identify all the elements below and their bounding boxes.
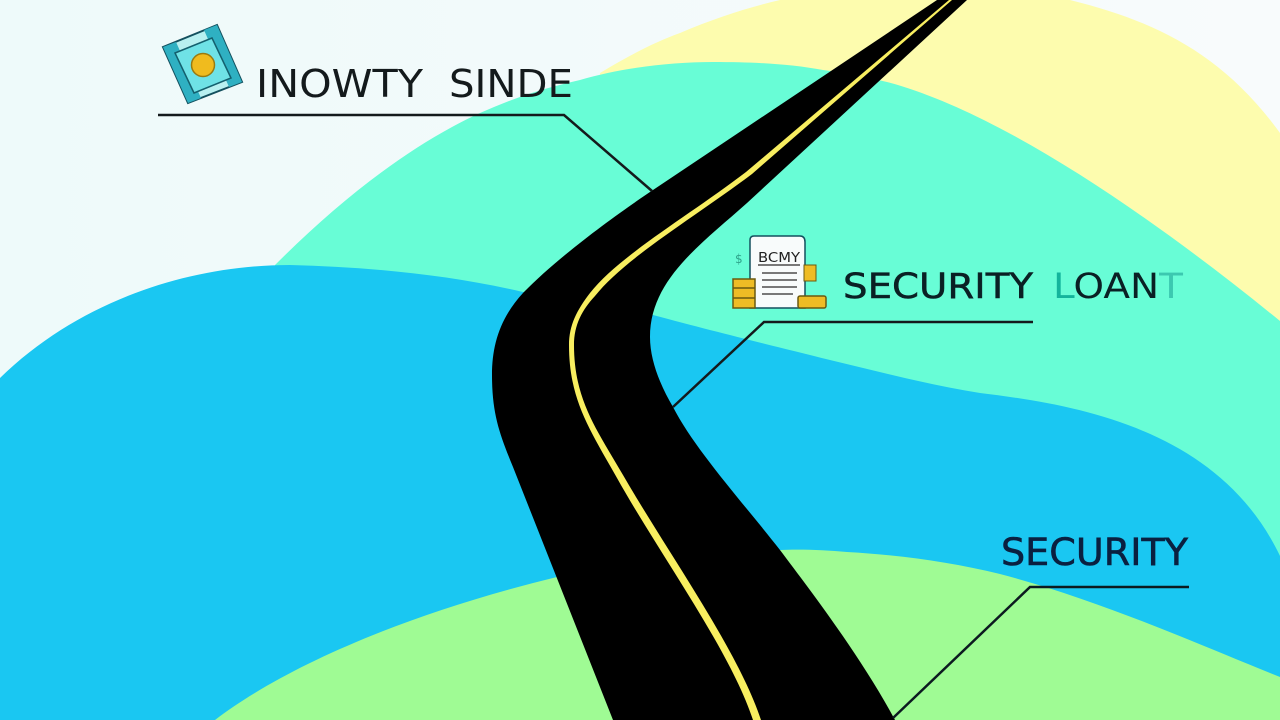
heading: INOWTY (256, 62, 424, 106)
hill: yellow (600, 0, 1280, 400)
road (492, 0, 967, 720)
callout: Inowty Sinde (158, 25, 652, 191)
heading (256, 62, 573, 106)
callout: Security Loant (673, 236, 1184, 407)
heading: LOAN T (1053, 267, 1184, 307)
icon: framed coin (163, 25, 242, 103)
heading: SECURITY (843, 267, 1034, 307)
road centre line (569, 0, 952, 720)
leader line (158, 115, 652, 191)
hill: mint (275, 62, 1280, 600)
hill: green (215, 550, 1280, 720)
callout: Security (893, 531, 1189, 718)
heading: SINDE (449, 62, 573, 106)
icon: document and coins: $ (735, 252, 743, 266)
hill: blue (0, 265, 1280, 720)
leader line (673, 322, 1033, 407)
heading (843, 267, 1184, 307)
icon: document and coins (733, 236, 826, 308)
leader line (893, 587, 1189, 718)
heading: SECURITY (1001, 531, 1188, 574)
icon: document and coins: BCMY (758, 251, 800, 266)
